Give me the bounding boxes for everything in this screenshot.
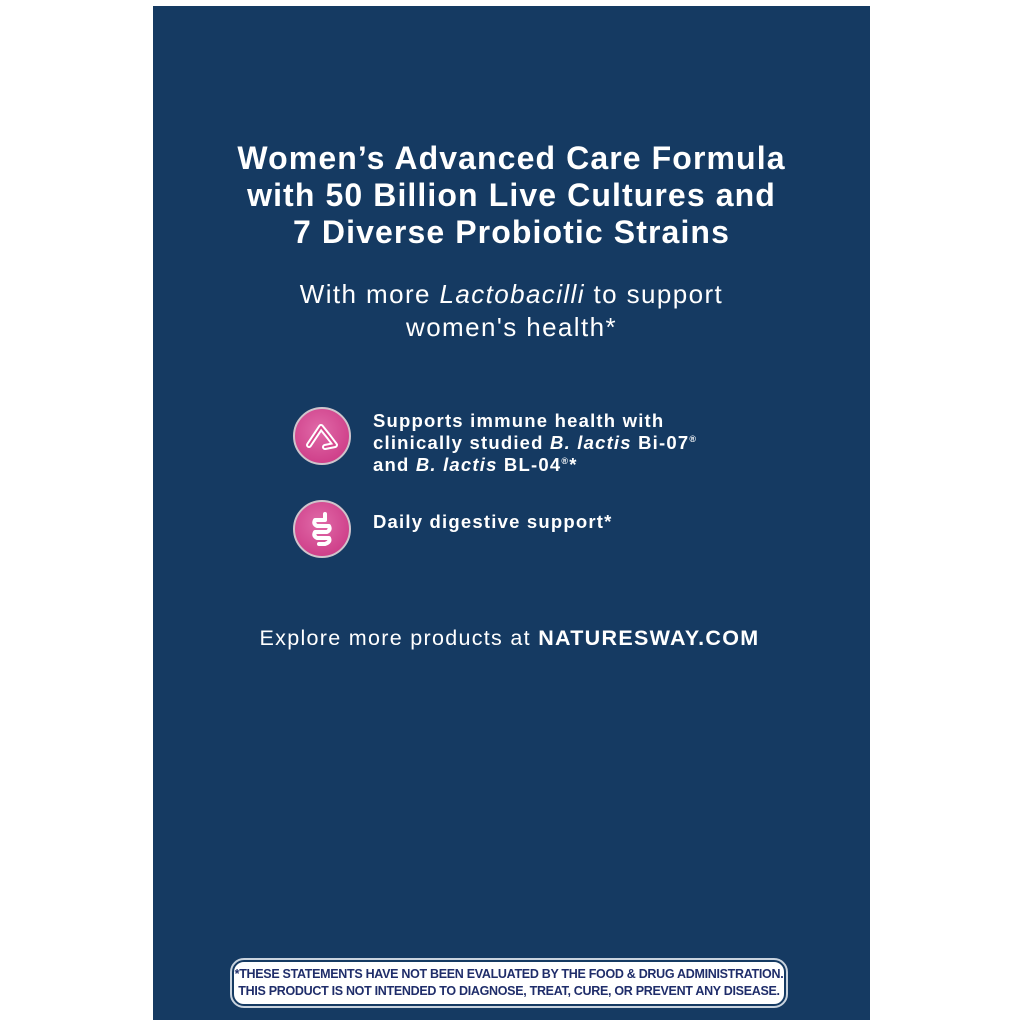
disclaimer box: [232, 960, 786, 1006]
website callout: Explore more products at NATURESWAY.COM: [260, 626, 759, 650]
subtitle: With more Lactobacilli to support: [300, 279, 723, 309]
bullet: immune health: Supports immune health with: [373, 410, 664, 431]
icon: bacteria: [293, 407, 351, 465]
disclaimer box: THIS PRODUCT IS NOT INTENDED TO DIAGNOSE, TREAT, CURE, OR PREVENT ANY DISEASE.: [238, 984, 780, 998]
bullet: immune health: [373, 410, 697, 475]
bullet: immune health: clinically studied B. lactis Bi-07®: [373, 432, 697, 453]
title: 7 Diverse Probiotic Strains: [293, 214, 730, 250]
title: [237, 140, 786, 250]
icon: intestine: [293, 500, 351, 558]
subtitle: [300, 279, 723, 342]
title: Women’s Advanced Care Formula: [237, 140, 786, 176]
bullet: digestive: Daily digestive support*: [373, 511, 613, 532]
disclaimer box: *THESE STATEMENTS HAVE NOT BEEN EVALUATED BY THE FOOD & DRUG ADMINISTRATION.: [235, 967, 783, 981]
subtitle: women's health*: [406, 312, 617, 342]
title: with 50 Billion Live Cultures and: [247, 177, 776, 213]
bullet: immune health: and B. lactis BL-04®*: [373, 454, 578, 475]
panel: product box back: [153, 6, 870, 1020]
